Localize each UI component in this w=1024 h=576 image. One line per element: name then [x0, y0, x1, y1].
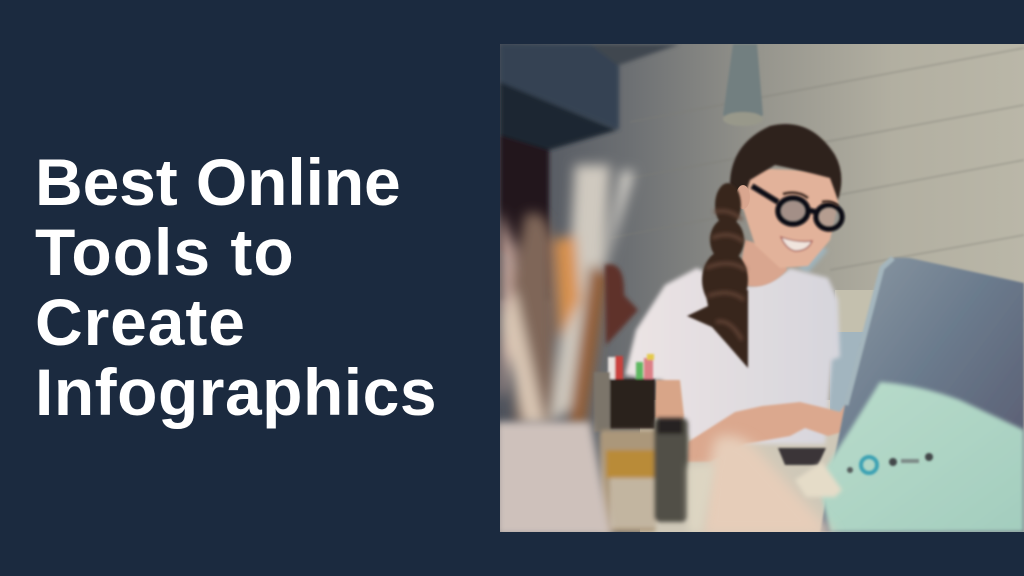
right forearm and hand	[686, 402, 846, 462]
eyebrows	[783, 193, 838, 206]
neck	[738, 240, 787, 286]
paper on table	[795, 462, 842, 497]
woman	[625, 124, 846, 462]
ear	[736, 185, 750, 209]
face	[742, 168, 838, 268]
photo: woman with glasses working on a laptop	[500, 44, 1024, 532]
ponytail braid	[687, 183, 748, 368]
table edge	[688, 465, 715, 532]
cloth on laptop	[818, 382, 1024, 532]
glass jars	[600, 418, 688, 532]
left arm	[654, 380, 684, 430]
dark ceiling beam	[500, 44, 680, 300]
t-shirt	[625, 268, 840, 444]
glasses	[752, 186, 842, 229]
title: Infographics	[35, 355, 437, 429]
wall background	[500, 44, 1024, 532]
title: Best Online	[35, 145, 401, 219]
hair top	[730, 124, 841, 200]
keyboard under hands	[778, 448, 826, 465]
note on wall	[798, 243, 828, 273]
blurred foreground cone	[702, 435, 835, 536]
pencil cup	[594, 354, 655, 432]
logo on cloth	[847, 453, 933, 473]
laptop	[820, 258, 1024, 532]
figurine behind brushes	[605, 264, 638, 345]
pendant lamp	[723, 44, 763, 126]
title: Create	[35, 285, 246, 359]
smile	[781, 237, 812, 251]
blurred foreground brushes	[500, 165, 634, 425]
title: Tools to	[35, 215, 295, 289]
blurred foreground cup	[496, 422, 612, 536]
title	[35, 145, 437, 429]
